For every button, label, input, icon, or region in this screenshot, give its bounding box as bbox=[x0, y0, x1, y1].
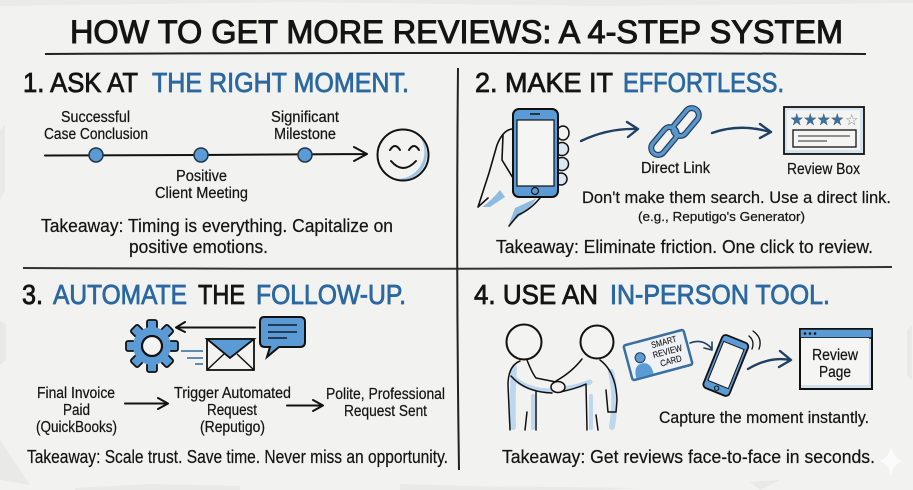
heading step 2: EFFORTLESS. bbox=[623, 67, 784, 98]
panel: step 1 ask at the right moment bbox=[23, 67, 428, 257]
icon: review page window: Page bbox=[819, 364, 851, 381]
arrow bbox=[287, 400, 323, 411]
timeline labels: Successful bbox=[61, 109, 130, 126]
heading step 3: FOLLOW-UP. bbox=[256, 279, 406, 310]
icon: smart review card bbox=[623, 330, 693, 380]
timeline labels: Client Meeting bbox=[155, 185, 248, 202]
icon: review box bbox=[784, 107, 864, 154]
heading step 4: 4. USE AN bbox=[474, 279, 598, 310]
heading step 4 bbox=[474, 279, 830, 310]
icon: tilted phone with signal bbox=[702, 331, 760, 397]
takeaway step 1 bbox=[41, 216, 393, 257]
flow: polite professional request sent: Request Sent bbox=[344, 403, 428, 420]
heading step 1 bbox=[23, 67, 409, 98]
heading step 3: THE bbox=[198, 279, 245, 310]
takeaway step 1: Takeaway: Timing is everything. Capitalize on bbox=[41, 216, 393, 236]
icon: two people shaking hands bbox=[506, 324, 617, 430]
flow: final invoice paid bbox=[36, 385, 117, 436]
icon: envelope bbox=[181, 339, 254, 370]
takeaway step 3: Takeaway: Scale trust. Save time. Never miss an opportunity. bbox=[27, 447, 448, 467]
panel: step 2 make it effortless bbox=[475, 67, 891, 257]
timeline labels: Case Conclusion bbox=[44, 126, 148, 143]
direct link note: Don't make them search. Use a direct link. bbox=[582, 188, 891, 207]
icon labels: Direct Link bbox=[641, 160, 710, 177]
takeaway step 4: Takeaway: Get reviews face-to-face in seconds. bbox=[502, 447, 875, 467]
icon: hand holding phone bbox=[478, 109, 569, 226]
capture note: Capture the moment instantly. bbox=[659, 408, 869, 427]
flow: trigger automated request: Trigger Automated bbox=[174, 385, 291, 402]
timeline labels: Positive bbox=[176, 168, 227, 185]
takeaway step 2: Takeaway: Eliminate friction. One click to review. bbox=[496, 237, 873, 257]
panel: step 3 automate the follow-up bbox=[22, 279, 448, 467]
icon: review box: ☆ bbox=[845, 112, 858, 129]
heading step 1: THE RIGHT MOMENT. bbox=[152, 67, 409, 98]
arrow phone to page bbox=[748, 351, 791, 369]
watermark sparkle bbox=[879, 446, 903, 476]
timeline labels: Significant bbox=[271, 109, 340, 126]
icon: review page window: Review bbox=[812, 347, 859, 364]
flow: final invoice paid: Final Invoice bbox=[37, 385, 115, 402]
icon: chain link bbox=[648, 105, 702, 158]
timeline labels bbox=[44, 109, 340, 202]
heading step 3: AUTOMATE bbox=[53, 279, 187, 310]
title: HOW TO GET MORE REVIEWS: A 4-STEP SYSTEM bbox=[70, 14, 843, 50]
arrow to gear bbox=[176, 322, 255, 332]
heading step 1: 1. ASK AT bbox=[23, 67, 138, 98]
flow: trigger automated request bbox=[174, 385, 291, 436]
icon: smart review card: SMART bbox=[650, 334, 678, 350]
flow: trigger automated request: (Reputigo) bbox=[200, 419, 265, 436]
icon: review page window bbox=[800, 329, 872, 389]
flow: polite professional request sent: Polite, Professional bbox=[326, 386, 445, 403]
direct link note bbox=[582, 188, 891, 224]
panel: step 4 use an in-person tool bbox=[474, 279, 875, 467]
icon: review box: ★★★★ bbox=[790, 112, 844, 129]
arrow card to phone bbox=[690, 341, 712, 350]
icon: smart review card: REVIEW bbox=[652, 343, 684, 360]
flow: polite professional request sent bbox=[326, 386, 445, 420]
arrow bbox=[125, 398, 168, 409]
arrow to link bbox=[581, 122, 638, 141]
icon labels: Review Box bbox=[787, 161, 860, 178]
heading step 2: 2. MAKE IT bbox=[475, 67, 613, 98]
flow: final invoice paid: (QuickBooks) bbox=[36, 419, 117, 436]
icon: speech bubble bbox=[260, 317, 305, 357]
icon: smiley face bbox=[378, 130, 428, 180]
takeaway step 1: positive emotions. bbox=[129, 237, 268, 257]
timeline labels: Milestone bbox=[274, 126, 336, 143]
heading step 4: IN-PERSON TOOL. bbox=[610, 279, 830, 310]
flow: final invoice paid: Paid bbox=[63, 402, 90, 419]
timeline arrow bbox=[45, 147, 367, 162]
heading step 2 bbox=[475, 67, 784, 98]
icon: gear bbox=[126, 320, 178, 372]
arrow to review box bbox=[712, 124, 771, 138]
direct link note: (e.g., Reputigo's Generator) bbox=[638, 209, 805, 224]
flow: trigger automated request: Request bbox=[207, 402, 258, 419]
heading step 3: 3. bbox=[22, 279, 43, 310]
heading step 3 bbox=[22, 279, 406, 310]
icon labels bbox=[641, 160, 860, 178]
icon: smart review card: CARD bbox=[659, 353, 683, 369]
